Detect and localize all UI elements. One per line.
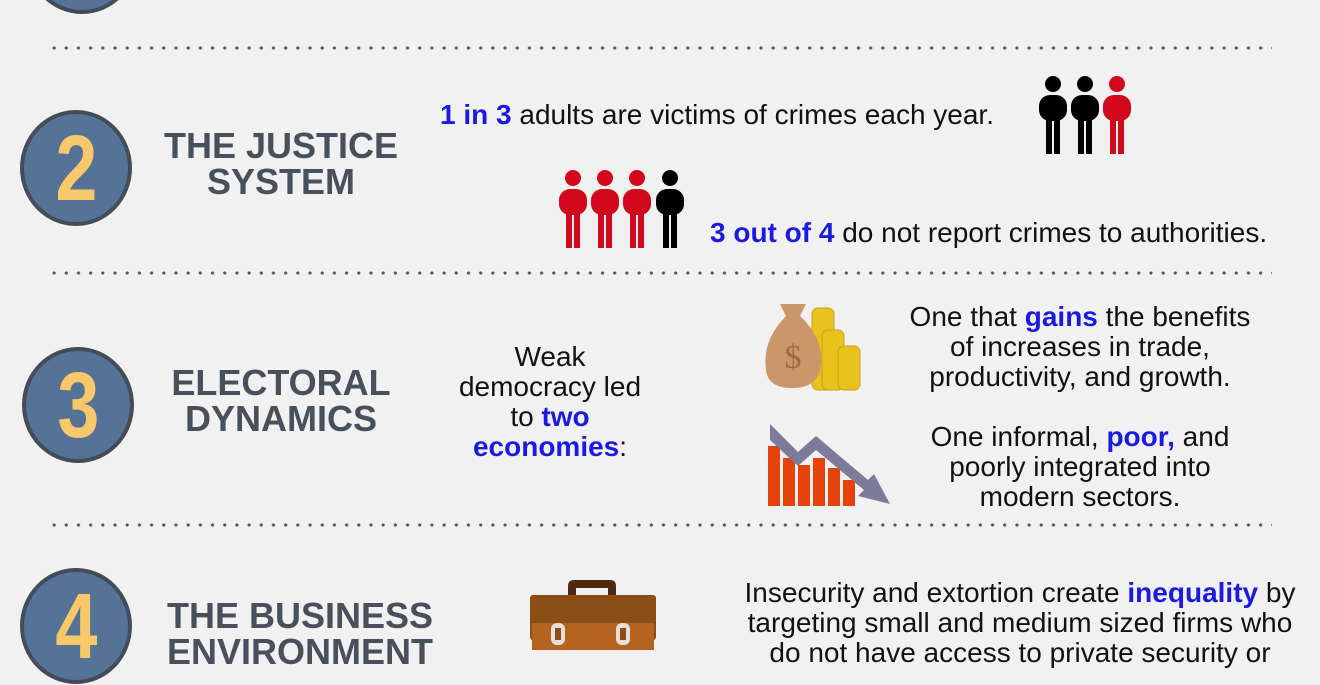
text: gains <box>910 301 1250 392</box>
circle 1 partial <box>26 0 138 14</box>
text: 1 in 3: 1 in 3 adults are victims of crimes each year. <box>440 99 994 130</box>
heading: business environment: ENVIRONMENT <box>167 631 433 672</box>
text: poor: One informal, poor, and <box>931 421 1229 452</box>
text: weak democracy: to two <box>510 401 590 432</box>
circle 2 <box>20 110 132 226</box>
heading: electoral dynamics: DYNAMICS <box>185 398 377 439</box>
text: gains: One that gains the benefits <box>910 301 1250 332</box>
text: gains: productivity, and growth. <box>929 361 1231 392</box>
text: 3 out of 4: 3 out of 4 do not report crimes to authorities. <box>710 217 1267 248</box>
text: inequality: Insecurity and extortion create inequality by <box>745 577 1295 608</box>
icon: people 3 of 4 <box>559 170 684 248</box>
heading: electoral dynamics: ELECTORAL <box>171 362 391 403</box>
text: poor <box>931 421 1229 512</box>
circle 3: 3 <box>57 353 99 457</box>
text: inequality: do not have access to private security or <box>769 637 1271 668</box>
circle 2: 2 <box>55 116 97 220</box>
icon: money bag: $ <box>784 339 802 376</box>
heading: justice system <box>164 125 398 202</box>
text: weak democracy: economies: <box>473 431 627 462</box>
circle 4 <box>20 568 132 684</box>
text: poor: modern sectors. <box>980 481 1180 512</box>
icon: money bag <box>765 304 860 390</box>
icon: declining chart <box>768 424 890 506</box>
circle 4: 4 <box>55 574 97 678</box>
text: weak democracy <box>459 341 641 462</box>
heading: business environment: THE BUSINESS <box>167 595 433 636</box>
text: gains: of increases in trade, <box>950 331 1210 362</box>
text: weak democracy: democracy led <box>459 371 641 402</box>
icon: briefcase <box>530 580 656 650</box>
heading: electoral dynamics <box>171 362 391 439</box>
text: poor: poorly integrated into <box>949 451 1211 482</box>
circle 3 <box>22 347 134 463</box>
text: weak democracy: Weak <box>514 341 586 372</box>
icon: people 1 in 3 <box>1039 76 1131 154</box>
heading: justice system: THE JUSTICE <box>164 125 398 166</box>
text: inequality <box>745 577 1296 668</box>
heading: justice system: SYSTEM <box>207 161 355 202</box>
text: inequality: targeting small and medium sized firms who <box>748 607 1292 638</box>
heading: business environment <box>167 595 433 672</box>
